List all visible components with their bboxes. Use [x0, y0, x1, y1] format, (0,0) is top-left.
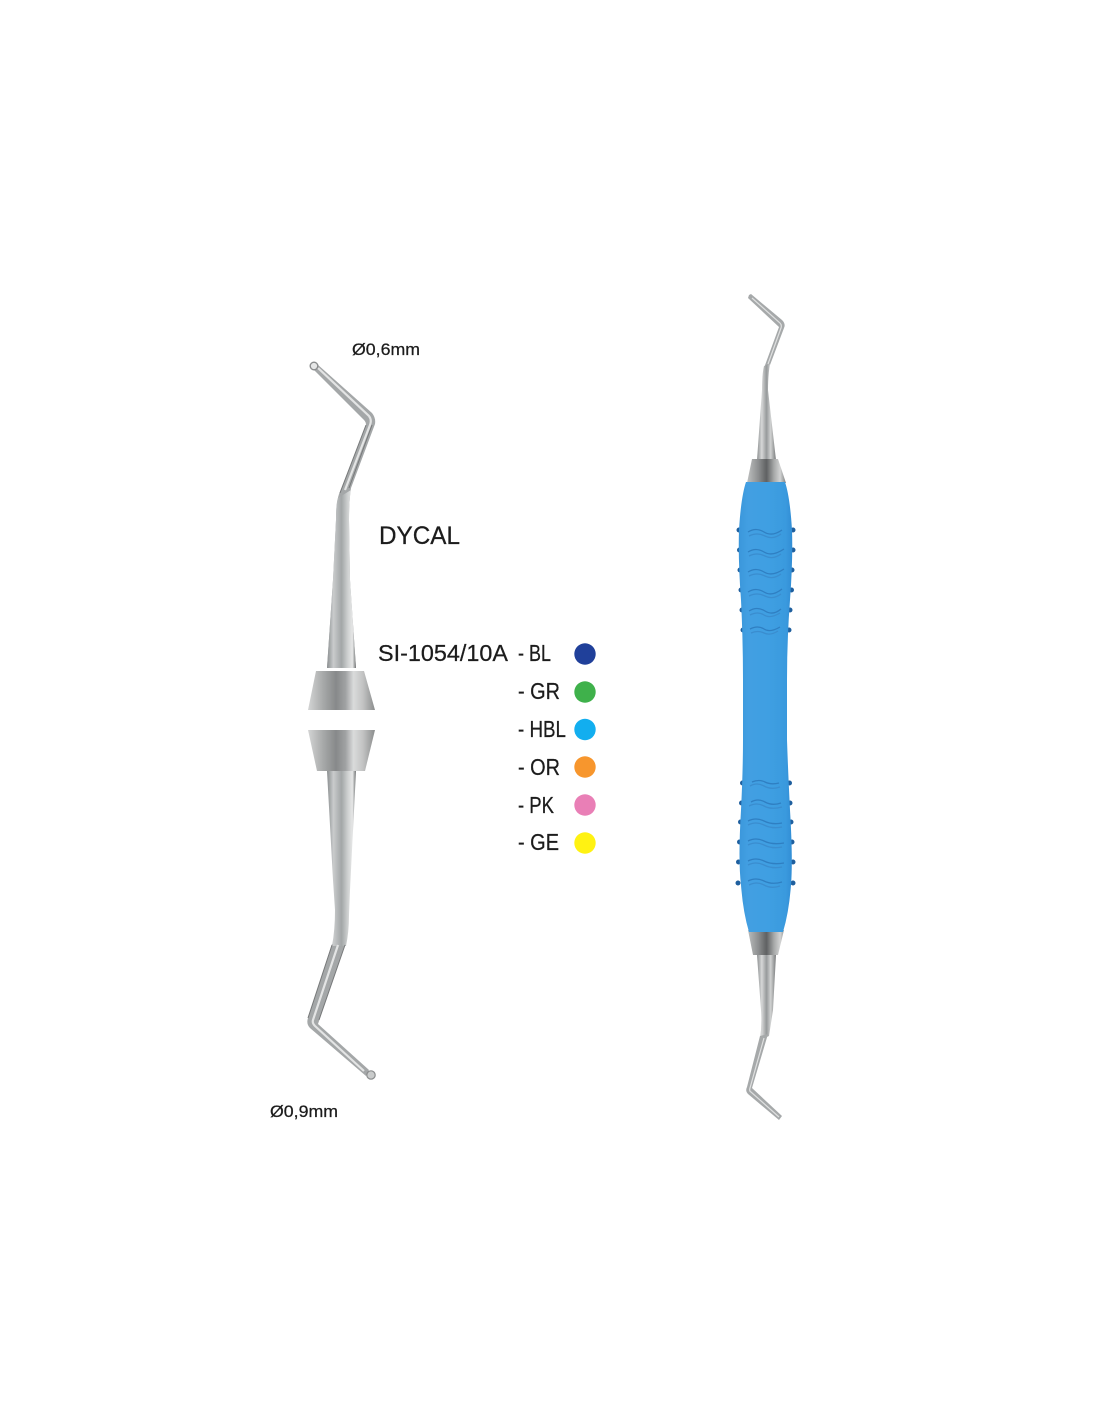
legend row: BL	[518, 640, 596, 666]
lower working end	[746, 955, 782, 1120]
legend row: GE	[518, 829, 596, 855]
colour legend	[518, 640, 596, 855]
legend row: GE: - GE	[518, 829, 559, 855]
lower collar	[308, 730, 375, 771]
handle grip waves	[748, 530, 784, 887]
product code: SI-1054/10A	[378, 640, 509, 666]
upper collar	[308, 671, 375, 710]
lower ferrule	[748, 930, 784, 955]
product name: DYCAL	[379, 522, 460, 550]
legend row: OR: - OR	[518, 754, 560, 780]
right instrument: tool with blue silicone handle	[736, 294, 796, 1120]
lower working end	[307, 771, 375, 1079]
legend row: OR	[518, 754, 596, 780]
legend row: GR	[518, 678, 596, 704]
legend row: GR: - GR	[518, 678, 560, 704]
upper working end	[310, 362, 375, 668]
legend row: HBL: - HBL	[518, 716, 566, 742]
legend row: BL: - BL	[518, 640, 551, 666]
legend row: PK: - PK	[518, 792, 555, 818]
blue handle	[739, 482, 792, 932]
left instrument: enlarged double-ended tool	[307, 362, 375, 1079]
upper ferrule	[747, 459, 786, 483]
diameter label: top: Ø0,6mm	[352, 340, 420, 359]
diameter label: bottom: Ø0,9mm	[270, 1102, 338, 1121]
handle nubs	[736, 528, 796, 886]
legend row: PK	[518, 792, 596, 818]
upper working end	[748, 294, 785, 460]
